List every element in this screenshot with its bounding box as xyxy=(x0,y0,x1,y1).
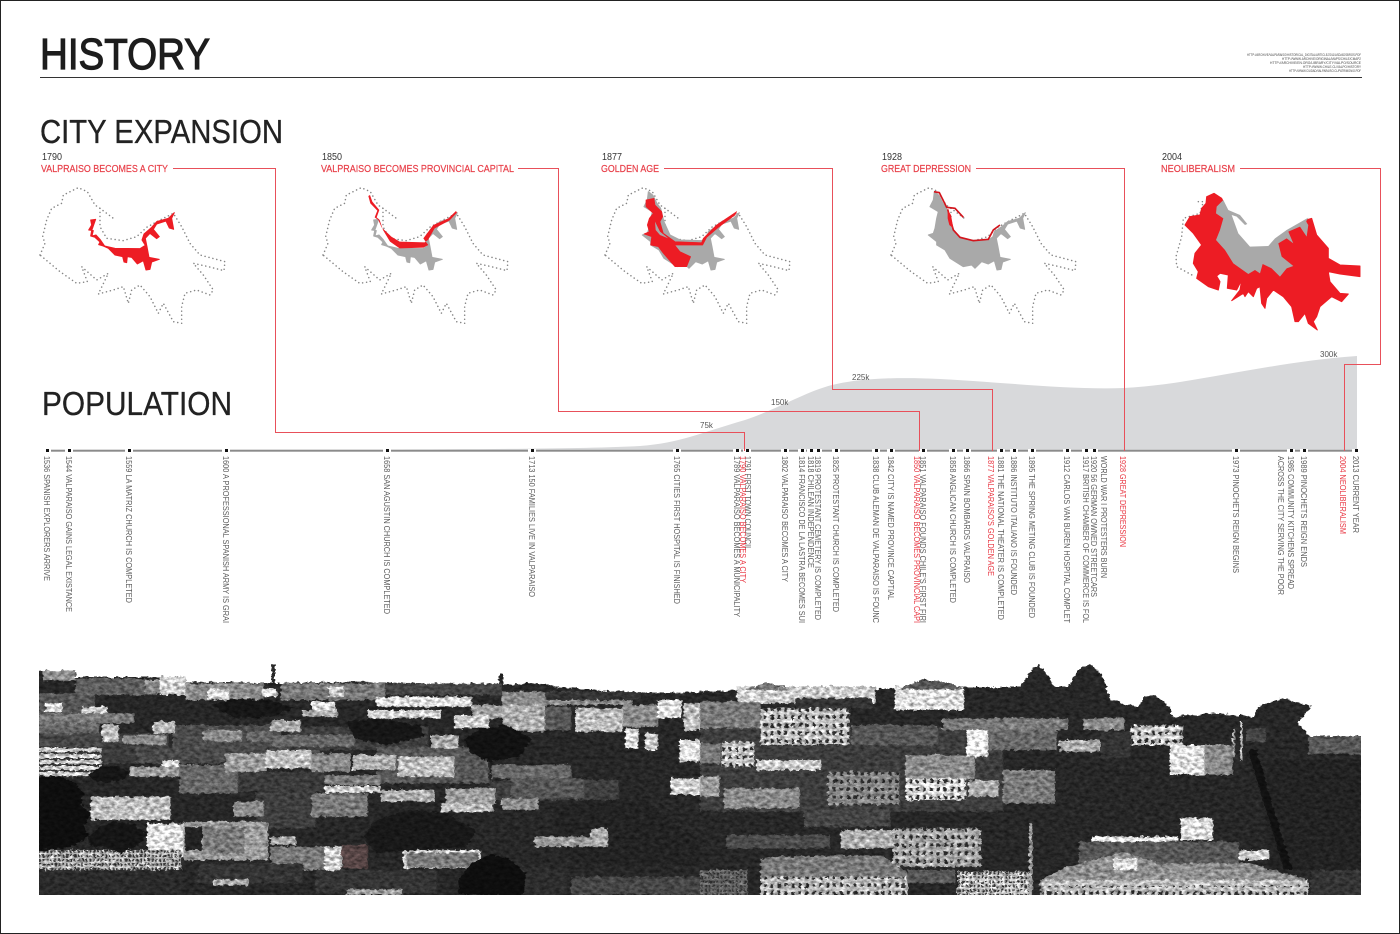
event: 1713: 1713 150 FAMILIES LIVE IN VALPARAISO xyxy=(527,456,537,597)
population labels: 225k xyxy=(852,373,870,382)
timeline event labels xyxy=(42,456,1361,624)
era label: GOLDEN AGE xyxy=(601,163,659,175)
map xyxy=(891,188,1076,323)
map xyxy=(605,188,790,323)
panel: 1790 xyxy=(40,152,225,323)
era label: NEOLIBERALISM xyxy=(1161,163,1235,175)
event: 1765: 1765 CITIES FIRST HOSPITAL IS FINISHED xyxy=(672,456,682,604)
population labels: 75k xyxy=(700,421,714,430)
heading: population: POPULATION xyxy=(42,385,232,422)
era label: VALPRAISO BECOMES PROVINCIAL CAPITAL xyxy=(321,163,514,175)
map xyxy=(40,188,225,323)
event: 1536: 1536 SPANISH EXPLORERS ARRIVE xyxy=(42,456,52,581)
event: 1814: 1814 FRANCISCO DE LA LASTRA BECOMES SUI xyxy=(797,456,807,623)
source references: HTTP://WWW.CIUDAD/VALPARAISO.CL/PATRIMONIO.PDF xyxy=(1289,69,1362,73)
event: 1789: 1789 VALPARAISO BECOMES A MUNICIPALITY xyxy=(732,456,742,617)
event: 1973: 1973 PINOCHETS REIGN BEGINS xyxy=(1231,456,1241,573)
event: world war I: WORLD WAR I PROTESTERS BURN xyxy=(1099,456,1109,578)
year: 1850 xyxy=(322,152,342,163)
event: 1851: 1851 VALPARAISO FOUNDS CHILE'S FIRST FIRI xyxy=(918,456,928,623)
event: 2013: 2013 CURRENT YEAR xyxy=(1351,456,1361,533)
year: 1877 xyxy=(602,152,622,163)
population labels: 150k xyxy=(771,398,789,407)
event: 1842: 1842 CITY IS NAMED PROVINCE CAPTIAL xyxy=(886,456,896,600)
connector lines xyxy=(173,168,1380,451)
heading: city expansion: CITY EXPANSION xyxy=(40,113,283,150)
event: 1881: 1881 THE NATIONAL THEATER IS COMPLETED xyxy=(996,456,1006,620)
event: 1928: 1928 GREAT DEPRESSION xyxy=(1118,456,1128,547)
population labels xyxy=(700,350,1338,430)
year: 1790 xyxy=(42,152,62,163)
map xyxy=(1176,193,1360,330)
source references xyxy=(1247,53,1362,73)
event: 1989: 1989 PINOCHETS REIGN ENDS xyxy=(1299,456,1309,567)
event: 2004: 2004 NEOLIBERALISM xyxy=(1338,456,1348,534)
year: 2004 xyxy=(1162,152,1182,163)
population labels: 300k xyxy=(1320,350,1338,359)
population area chart xyxy=(385,356,1357,450)
era label: VALPRAISO BECOMES A CITY xyxy=(41,163,168,175)
timeline axis xyxy=(43,449,1360,453)
event: 1838: 1838 CLUB ALEMAN DE VALPARAISO IS FOUNC xyxy=(871,456,881,623)
event: 1985: 1985 COMMUNITY KITCHENS SPREAD xyxy=(1286,456,1296,589)
event: 1818: 1818 CHILEAN INDEPENDENCE xyxy=(806,456,816,568)
map xyxy=(323,188,508,323)
event: 1544: 1544 VALPARAISO GAINS LEGAL EXISTANCE xyxy=(64,456,74,612)
event: 1658: 1658 SAN AGUSTIN CHURCH IS COMPLETED xyxy=(382,456,392,614)
event: 1985 second line: ACROSS THE CITY SERVING THE POOR xyxy=(1276,456,1286,595)
source references: HTTP://ARCHIVE/EN.ORG/LIBRARY/CITY/VALPO/SOURCE xyxy=(1270,61,1362,65)
event: 1819: 1819 PROTESTANT CEMETERY IS COMPLETED xyxy=(813,456,823,620)
event: 1790: 1790 VALPARAISO BECOMES A CITY xyxy=(738,456,748,583)
event: 1559: 1559 LA MATRIZ CHURCH IS COMPLETED xyxy=(124,456,134,603)
source references: HTTP://WWW.ARCHIVE/ORIGINAL/MAPS/CHILE/CMAP2 xyxy=(1282,57,1361,61)
source references: HTTP://WWW.CHILE.CL/VALPO/HISTORY xyxy=(1303,65,1362,69)
panel: 1928 xyxy=(881,152,1076,323)
event: 1791: 1791 FIRST TOWN COUNCIL xyxy=(743,456,753,550)
title: HISTORY xyxy=(40,30,210,79)
event: 1858: 1858 ANGLICAN CHURCH IS COMPLETED xyxy=(948,456,958,603)
event: 1825: 1825 PROTESTANT CHURCH IS COMPLETED xyxy=(831,456,841,612)
source references: HTTP://ARCHIVE/VALPARAISO/HISTORICAL_DIGITAL/ARTICLE/2011/ASD/ADSBROS.PDF xyxy=(1247,53,1362,57)
event: 1850: 1850 VALPARAISO BECOMES PROVINCIAL CAPI xyxy=(912,456,922,623)
panel: 2004 xyxy=(1161,152,1360,330)
event: 1912: 1912 CARLOS VAN BUREN HOSPITAL COMPLET xyxy=(1062,456,1072,624)
event: 1877: 1877 VALPARAISO'S GOLDEN AGE xyxy=(986,456,996,576)
event: 1802: 1802 VALPARAISO BECOMES A CITY xyxy=(780,456,790,582)
panel: 1850 xyxy=(321,152,514,323)
event: 1886: 1886 INSTITUTO ITALIANO IS FOUNDED xyxy=(1009,456,1019,595)
event: 1600: 1600 A PROFESSIONAL SPANISH ARMY IS GRAI xyxy=(221,456,231,623)
event: 1866: 1866 SPAIN BOMBARDS VALPRAISO xyxy=(962,456,972,583)
event: 1917: 1917 BRITISH CHAMBER OF COMMERCE IS FOL xyxy=(1081,456,1091,623)
header rule xyxy=(40,77,1362,78)
event: 1895: 1895 THE SPRING METING CLUB IS FOUNDED xyxy=(1027,456,1037,618)
panel: 1877 xyxy=(601,152,790,323)
photo: hillside city panorama xyxy=(30,664,1371,905)
year: 1928 xyxy=(882,152,902,163)
event: 1920: 1920 56 GERMAN OWNED STREETCARS xyxy=(1089,456,1099,597)
era label: GREAT DEPRESSION xyxy=(881,163,971,175)
